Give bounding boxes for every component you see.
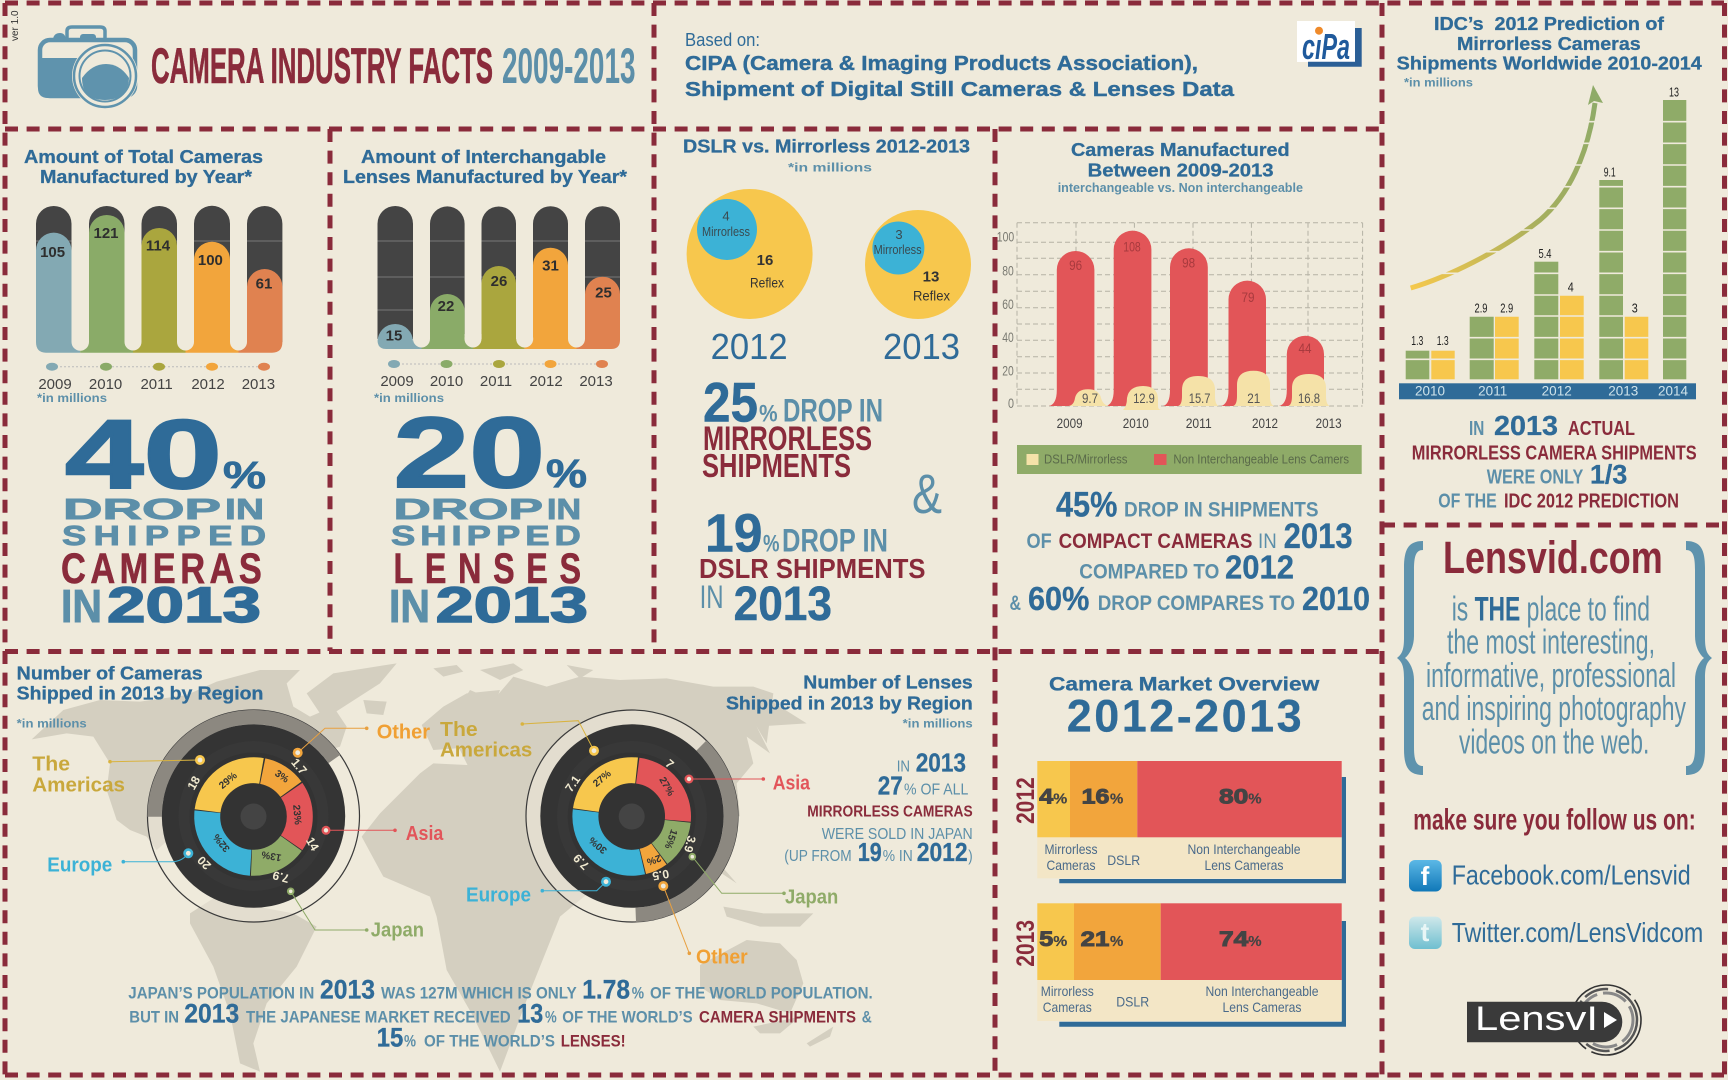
bar chart: interchangeable vs non interchangeable — [997, 223, 1363, 431]
source text — [685, 30, 1235, 101]
callout: Japan mirrorless share: IN — [897, 759, 910, 776]
text block: Japan population: CAMERA SHIPMENTS — [699, 1008, 856, 1027]
promo text — [1422, 590, 1686, 761]
chart: 2012 circles: 16 — [757, 252, 773, 269]
text block: Japan population: % — [545, 1008, 557, 1027]
bar chart: predicted vs actual: 3 — [1632, 301, 1638, 316]
donut chart: lenses by region: 2% — [645, 852, 663, 867]
chart: 2012 circles: 2012 — [711, 326, 788, 367]
stacked bar: 2012: DSLR — [1107, 852, 1140, 868]
callout: 40% drop — [61, 399, 266, 633]
bar chart: lenses: 2009 — [380, 373, 414, 390]
heading: cameras manufactured: Between 2009-2013 — [1088, 161, 1274, 181]
chart: 2012 circles — [687, 189, 813, 367]
bar chart: lenses: 26 — [491, 273, 507, 290]
callout: 40% drop: CAMERAS — [61, 545, 262, 593]
panel: Lensvid promo — [1397, 532, 1712, 1055]
bar chart: total cameras: 2009 — [38, 376, 72, 393]
stacked bar: 2013 — [1012, 903, 1346, 1027]
callout: Japan mirrorless share: 27 — [878, 770, 903, 800]
bar chart: lenses: 22 — [438, 298, 454, 315]
donut chart: cameras by region: 1.7 — [288, 756, 310, 778]
bar chart: interchangeable vs non interchangeable: 100 — [997, 229, 1014, 245]
donut chart: cameras by region: 18 — [184, 773, 203, 792]
heading: cameras manufactured: interchangeable vs. Non interchangeable — [1058, 180, 1303, 195]
heading: lenses by region: *in millions — [903, 716, 973, 730]
icon: facebook — [1409, 860, 1442, 892]
donut chart: cameras by region — [32, 710, 444, 942]
panel: cameras manufactured — [997, 140, 1370, 617]
bar chart: predicted vs actual: 2012 — [1542, 384, 1572, 399]
donut chart: cameras by region: 29% — [217, 770, 240, 792]
icon: right brace — [1686, 541, 1712, 775]
bar chart: total cameras: 100 — [198, 252, 223, 269]
callout: Japan mirrorless share: ) — [968, 848, 973, 865]
stacked bar: 2012: 2012 — [1012, 777, 1040, 824]
callout: 45% and 60% drop: 2012 — [1225, 548, 1294, 585]
heading: IDC prediction: Shipments Worldwide 2010-2014 — [1397, 53, 1702, 73]
bar chart: predicted vs actual: 9.1 — [1604, 165, 1616, 180]
bar chart: lenses: 2013 — [579, 373, 613, 390]
heading: IDC prediction: IDC’s 2012 Prediction of — [1434, 14, 1665, 34]
chart: 2013 circles: Mirrorless — [874, 242, 922, 257]
bar chart: total cameras: *in millions — [37, 391, 107, 405]
icon: facebook: f — [1421, 861, 1430, 891]
text block: Japan population: & — [862, 1008, 872, 1027]
callout: Japan: Japan — [371, 920, 424, 942]
stacked bar: 2013: 2013 — [1012, 920, 1040, 967]
callout: actual one third: IDC 2012 PREDICTION — [1504, 490, 1679, 512]
panel: IDC prediction — [1397, 14, 1702, 512]
stacked bar: 2013: % — [1053, 933, 1067, 950]
bar chart: lenses: 25 — [595, 285, 612, 302]
text block: Japan population: WAS 127M WHICH IS ONLY — [381, 983, 577, 1002]
chart: 2012 circles: Mirrorless — [702, 224, 750, 239]
callout: 19% drop: IN — [700, 579, 724, 615]
panel: total cameras by year — [24, 147, 282, 633]
heading: DSLR vs mirrorless: *in millions — [788, 161, 872, 175]
brand heading: Lensvid.com — [1443, 532, 1663, 583]
heading: IDC prediction: Mirrorless Cameras — [1457, 34, 1641, 54]
callout: Japan mirrorless share: WERE SOLD IN JAPAN — [822, 826, 973, 843]
bar chart: interchangeable vs non interchangeable: 44 — [1298, 340, 1312, 356]
callout: 25% drop: MIRRORLESS — [703, 420, 872, 458]
callout: actual one third: 1/3 — [1590, 459, 1627, 489]
callout: 40% drop: DROP — [63, 494, 221, 526]
heading: lenses: Amount of Interchangable — [361, 147, 606, 167]
callout: 45% and 60% drop: 45% — [1056, 486, 1117, 525]
callout: Asia: Asia — [406, 823, 444, 845]
source text: Based on: — [685, 30, 760, 50]
panel: interchangeable lenses by year — [343, 147, 627, 633]
bar chart: total cameras: 121 — [93, 225, 119, 242]
heading: total cameras: Manufactured by Year* — [40, 167, 252, 187]
stacked bar: 2012: Cameras — [1046, 857, 1096, 873]
callout: 20% drop — [389, 397, 588, 633]
callout: Americas (lenses): The — [440, 719, 478, 741]
bar chart: predicted vs actual: 13 — [1669, 85, 1679, 100]
stacked bar: 2013: Cameras — [1043, 999, 1092, 1015]
donut chart: lenses by region: 7.9 — [570, 851, 592, 873]
version label: ver 1.0 — [10, 10, 21, 41]
bar chart: lenses: 2012 — [529, 373, 563, 390]
bar chart: predicted vs actual: 2010 — [1415, 384, 1445, 399]
title: CAMERA INDUSTRY FACTS — [151, 38, 493, 94]
callout: Japan (lenses) — [688, 853, 838, 908]
stacked bar: 2012: 80 — [1219, 785, 1248, 808]
callout: Asia (lenses): Asia — [773, 772, 811, 794]
callout: Japan mirrorless share: 19 — [858, 837, 882, 867]
legend: Non Interchangeable Lens Camers — [1173, 451, 1349, 466]
donut chart: lenses by region: 7.1 — [562, 773, 583, 795]
donut chart: cameras by region: 32% — [211, 831, 233, 854]
callout: Europe (lenses) — [466, 877, 611, 907]
donut chart: lenses by region: 7 — [663, 756, 677, 772]
heading: cameras by region: Number of Cameras — [17, 663, 203, 683]
bar chart: predicted vs actual: 1.3 — [1411, 333, 1423, 348]
heading: lenses by region: Number of Lenses — [803, 672, 973, 692]
callout: Other (lenses) — [658, 881, 748, 968]
callout: Japan — [287, 888, 424, 942]
callout: 25% drop: SHIPMENTS — [702, 447, 851, 484]
text block: Japan population — [128, 974, 873, 1053]
callout: actual one third: OF THE — [1438, 490, 1497, 512]
callout: 45% and 60% drop — [1010, 486, 1370, 617]
stacked bar: 2013: DSLR — [1116, 994, 1149, 1010]
callout: 45% and 60% drop: & — [1010, 592, 1021, 615]
donut chart: lenses by region: 27% — [591, 768, 614, 790]
bar chart: interchangeable vs non interchangeable: 2009 — [1057, 415, 1083, 431]
callout: 45% and 60% drop: COMPARED TO — [1079, 560, 1219, 583]
callout: 45% and 60% drop: DROP COMPARES TO — [1098, 592, 1295, 615]
donut chart: lenses by region: 0.5 — [651, 867, 670, 883]
callout: Japan (lenses): Japan — [785, 886, 838, 908]
text block: Japan population: 15 — [377, 1023, 403, 1053]
heading: market overview: 2012-2013 — [1067, 691, 1302, 742]
callout: 40% drop: % — [223, 455, 266, 497]
callout: 19% drop: % — [763, 531, 780, 558]
text block: Japan population: 13 — [517, 999, 543, 1029]
arrow: growth curve — [1411, 85, 1603, 288]
callout: Japan mirrorless share: 2013 — [916, 748, 966, 778]
callout: 25% drop: DROP IN — [783, 393, 883, 429]
heading: lenses by region — [726, 672, 973, 730]
stacked bar: 2013: Non Interchangeable — [1206, 983, 1319, 999]
chart: 2013 circles: 3 — [895, 227, 903, 242]
heading: DSLR vs mirrorless: DSLR vs. Mirrorless 2012-2013 — [683, 137, 970, 157]
bar chart: predicted vs actual: 2.9 — [1500, 301, 1513, 316]
icon: left brace — [1397, 541, 1423, 775]
callout: 20% drop: SHIPPED — [391, 520, 581, 551]
donut chart: cameras by region: 3% — [272, 768, 291, 786]
source text: Shipment of Digital Still Cameras & Lenses Data — [685, 79, 1235, 101]
callout: Asia — [322, 823, 444, 845]
bar chart: total cameras: 2013 — [242, 376, 275, 393]
text block: Japan population: 2013 — [184, 999, 239, 1029]
callout: 20% drop: 20 — [394, 397, 545, 509]
stacked bar: 2012: Lens Cameras — [1204, 857, 1284, 873]
bar chart: interchangeable vs non interchangeable: 60 — [1002, 296, 1014, 312]
callout: 20% drop: IN — [547, 494, 581, 526]
heading: cameras by region: Shipped in 2013 by Region — [17, 683, 263, 703]
bar chart: interchangeable vs non interchangeable: 0 — [1008, 395, 1014, 411]
heading: lenses by region: Shipped in 2013 by Region — [726, 693, 973, 713]
donut chart: lenses by region: 27% — [656, 775, 676, 798]
callout: 45% and 60% drop: 60% — [1028, 580, 1089, 617]
heading: lenses — [343, 147, 627, 187]
text block: Japan population: OF THE WORLD’S — [562, 1008, 693, 1027]
stacked bar: 2012: % — [1110, 790, 1123, 807]
donut chart: lenses by region: 3.9 — [681, 834, 699, 854]
bar chart: interchangeable vs non interchangeable: 2012 — [1252, 415, 1278, 431]
callout: 19% drop: 2013 — [734, 578, 832, 631]
bar chart: total cameras: 114 — [146, 238, 171, 255]
stacked bar: 2013: Mirrorless — [1041, 983, 1094, 999]
callout: actual one third: WERE ONLY — [1487, 466, 1584, 488]
panel: DSLR vs mirrorless — [683, 137, 971, 631]
text block: Japan population: LENSES! — [561, 1032, 626, 1051]
bar chart: interchangeable vs non interchangeable: 16.8 — [1298, 390, 1320, 406]
callout: 19% drop: 19 — [705, 504, 762, 564]
icon: Lensvid logo — [1467, 985, 1641, 1055]
bar chart: predicted vs actual: 1.3 — [1437, 333, 1449, 348]
panel: camera market overview — [1012, 675, 1346, 1027]
bar chart: predicted vs actual: 2013 — [1608, 384, 1638, 399]
callout: 45% and 60% drop: DROP IN SHIPMENTS — [1124, 499, 1318, 522]
text block: Japan population: JAPAN’S POPULATION IN — [128, 983, 314, 1002]
text block: Japan population: % — [404, 1032, 416, 1051]
chart: 2012 circles: 4 — [722, 209, 730, 224]
bar chart: interchangeable vs non interchangeable: 2010 — [1123, 415, 1149, 431]
callout: 25% drop: 25 — [703, 371, 758, 434]
callout: Other: Other — [377, 721, 430, 743]
panel: regional shipments — [17, 663, 973, 1053]
bar chart: interchangeable vs non interchangeable: 79 — [1242, 289, 1255, 305]
callout: Other — [293, 721, 430, 758]
callout: Americas: Americas — [32, 775, 125, 797]
world map background — [32, 663, 833, 1072]
heading: cameras manufactured: Cameras Manufactured — [1071, 140, 1290, 160]
chart: 2013 circles: Reflex — [913, 288, 950, 304]
callout: Americas: The — [32, 754, 70, 776]
heading: lenses: Lenses Manufactured by Year* — [343, 167, 627, 187]
callout: 20% drop: DROP — [394, 494, 543, 526]
callout: Japan mirrorless share — [784, 748, 973, 867]
donut chart: lenses by region: 15% — [662, 828, 679, 850]
callout: actual one third: ACTUAL — [1568, 418, 1635, 440]
icon: twitter — [1409, 917, 1442, 949]
bar chart: total cameras: 105 — [40, 244, 65, 261]
text block: Japan population: % — [632, 983, 644, 1002]
icon: Lensvid logo: LensvI — [1475, 1000, 1598, 1038]
bar chart: lenses: *in millions — [374, 391, 444, 405]
callout: 20% drop: LENSES — [394, 546, 581, 593]
callout: 45% and 60% drop: 2010 — [1302, 580, 1370, 617]
bar chart: lenses: 15 — [386, 328, 402, 345]
callout: 25% drop — [702, 371, 883, 484]
stacked bar: 2013: 74 — [1219, 928, 1249, 951]
bar chart: interchangeable vs non interchangeable: 12.9 — [1133, 390, 1155, 406]
heading: total cameras — [24, 147, 263, 187]
callout: 20% drop: % — [546, 452, 587, 496]
stacked bar: 2013: Lens Cameras — [1222, 999, 1302, 1015]
callout: actual one third — [1412, 410, 1697, 512]
heading: IDC prediction — [1397, 14, 1702, 90]
bar chart: predicted vs actual: 5.4 — [1538, 246, 1552, 261]
bar chart: predicted vs actual: 2.9 — [1474, 301, 1488, 316]
callout: Japan mirrorless share: % OF ALL — [904, 781, 968, 798]
callout: 40% drop: IN — [225, 494, 264, 526]
donut chart: cameras by region: 20 — [194, 853, 214, 873]
callout: Europe: Europe — [47, 855, 112, 877]
text block: Japan population: OF THE WORLD’S — [424, 1032, 555, 1051]
bar chart: total cameras: 2011 — [140, 376, 173, 393]
callout: 40% drop: SHIPPED — [62, 520, 266, 551]
chart: 2013 circles — [865, 210, 971, 367]
callout: 19% drop: DROP IN — [782, 523, 888, 559]
bar chart: interchangeable vs non interchangeable: 2011 — [1186, 415, 1212, 431]
legend: DSLR/Mirrorless — [1044, 451, 1128, 466]
bar chart: predicted vs actual: 4 — [1568, 280, 1574, 295]
stacked bar: 2013: % — [1110, 933, 1123, 950]
bar chart: lenses: 2011 — [480, 373, 512, 390]
bar chart: interchangeable vs non interchangeable: 2013 — [1316, 415, 1342, 431]
stacked bar: 2012: 4 — [1039, 785, 1054, 808]
callout: 45% and 60% drop: 2013 — [1284, 517, 1353, 556]
bar chart: predicted vs actual — [1399, 85, 1700, 399]
promo text: is THE place to find — [1452, 590, 1650, 628]
callout: actual one third: 2013 — [1494, 410, 1558, 441]
bar chart: interchangeable vs non interchangeable: 108 — [1123, 239, 1141, 255]
callout: Americas (lenses): Americas — [440, 740, 532, 762]
bar chart: total cameras: 61 — [256, 276, 272, 293]
callout: Americas — [32, 754, 205, 797]
callout: Other (lenses): Other — [696, 946, 748, 968]
bar chart: total cameras: 2012 — [191, 376, 225, 393]
callout: 25% drop: % — [759, 401, 778, 428]
legend — [1017, 445, 1362, 474]
text block: Japan population: OF THE WORLD POPULATION. — [650, 983, 873, 1002]
stacked bar: 2012: Mirrorless — [1044, 841, 1098, 857]
callout: 45% and 60% drop: OF — [1026, 530, 1052, 553]
stacked bar: 2012: Non Interchangeable — [1188, 841, 1301, 857]
callout: actual one third: IN — [1469, 418, 1484, 440]
bar chart: interchangeable vs non interchangeable: 9.7 — [1082, 390, 1098, 406]
icon: camera — [38, 27, 138, 109]
text block: Japan population: 1.78 — [582, 974, 630, 1004]
bar chart: interchangeable vs non interchangeable: 40 — [1002, 329, 1014, 345]
bar chart: interchangeable vs non interchangeable: 98 — [1182, 255, 1195, 271]
callout: 40% drop: 2013 — [107, 577, 261, 633]
callout: 40% drop: IN — [61, 580, 102, 632]
callout: 19% drop: DSLR SHIPMENTS — [699, 553, 926, 584]
heading: cameras by region: *in millions — [17, 716, 87, 730]
bar chart: lenses: 2010 — [430, 373, 463, 390]
bar chart: lenses — [374, 206, 620, 405]
donut chart: cameras by region: 7.9 — [271, 868, 291, 886]
icon: CIPA logo — [1297, 21, 1362, 67]
heading: DSLR vs mirrorless — [683, 137, 970, 175]
bar chart: predicted vs actual: 2011 — [1478, 384, 1507, 399]
heading: market overview: Camera Market Overview — [1049, 675, 1320, 696]
bar chart: total cameras — [36, 206, 282, 405]
callout: Japan mirrorless share: % IN — [883, 848, 913, 865]
donut chart: lenses by region — [440, 676, 838, 968]
callout: Europe — [47, 848, 193, 877]
chart: 2013 circles: 13 — [923, 269, 939, 286]
bar chart: interchangeable vs non interchangeable: 15.7 — [1189, 390, 1211, 406]
callout: Asia (lenses) — [684, 772, 811, 794]
stacked bar: 2012: 16 — [1082, 785, 1109, 808]
heading: cameras by region — [17, 663, 263, 730]
heading: total cameras: Amount of Total Cameras — [24, 147, 263, 167]
callout: Europe (lenses): Europe — [466, 885, 531, 907]
text block: Japan population: THE JAPANESE MARKET RECEIVED — [246, 1008, 511, 1027]
callout: 20% drop: 2013 — [436, 577, 588, 633]
callout: Japan mirrorless share: (UP FROM — [784, 848, 852, 865]
title: 2009-2013 — [502, 38, 636, 94]
callout: 45% and 60% drop: COMPACT CAMERAS — [1059, 530, 1252, 553]
bar chart: interchangeable vs non interchangeable: 80 — [1002, 263, 1014, 279]
stacked bar: 2013: % — [1248, 933, 1262, 950]
bar chart: lenses: 31 — [542, 258, 559, 275]
donut chart: cameras by region: 23% — [290, 804, 303, 825]
bar chart: interchangeable vs non interchangeable: 20 — [1002, 363, 1014, 379]
heading: market overview — [1049, 675, 1320, 742]
chart: 2012 circles: Reflex — [750, 275, 784, 291]
text block: Japan population: BUT IN — [129, 1008, 179, 1027]
bar chart: total cameras: 2010 — [89, 376, 122, 393]
stacked bar: 2013: 5 — [1039, 928, 1054, 951]
callout: Japan mirrorless share: 2012 — [917, 837, 968, 867]
callout: Americas (lenses) — [440, 719, 599, 762]
icon: CIPA logo: cıPa — [1302, 26, 1350, 67]
callout: 19% drop — [699, 504, 926, 631]
chart: 2013 circles: 2013 — [883, 326, 960, 367]
text block: Japan population: 2013 — [320, 974, 375, 1004]
stacked bar: 2012: % — [1248, 790, 1262, 807]
callout: Japan mirrorless share: MIRRORLESS CAMERAS — [807, 804, 973, 821]
heading: IDC prediction: *in millions — [1404, 76, 1473, 90]
callout: 20% drop: IN — [389, 580, 430, 632]
stacked bar: 2012 — [1012, 761, 1346, 883]
donut chart: cameras by region: 14 — [303, 835, 322, 854]
stacked bar: 2013: 21 — [1081, 928, 1110, 951]
bar chart: interchangeable vs non interchangeable: 21 — [1247, 390, 1260, 406]
callout: 45% and 60% drop: IN — [1258, 530, 1277, 553]
heading: cameras manufactured — [1058, 140, 1303, 195]
callout: 40% drop: 40 — [65, 399, 222, 509]
bar chart: interchangeable vs non interchangeable: 96 — [1069, 257, 1082, 273]
donut chart: cameras by region: 13% — [261, 848, 282, 863]
source text: CIPA (Camera & Imaging Products Association), — [685, 53, 1198, 75]
stacked bar: 2012: % — [1053, 790, 1067, 807]
icon: twitter: t — [1421, 917, 1430, 947]
donut chart: lenses by region: 30% — [587, 834, 610, 856]
ampersand: & — [912, 462, 942, 525]
bar chart: predicted vs actual: 2014 — [1658, 384, 1689, 399]
